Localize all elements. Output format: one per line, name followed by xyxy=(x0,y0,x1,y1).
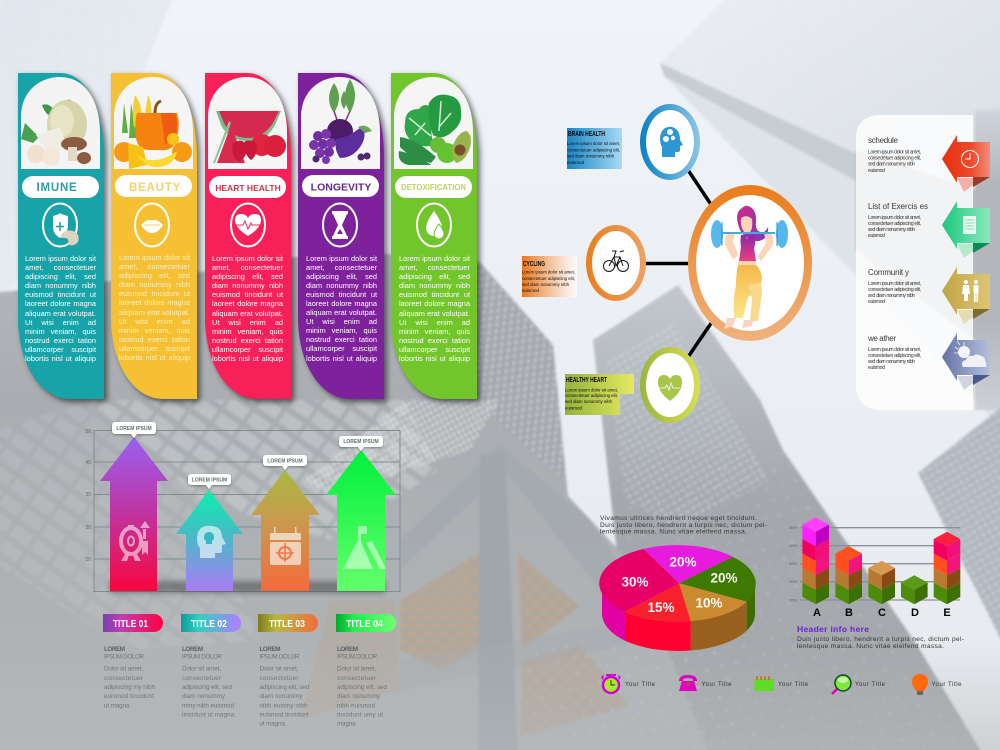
title pill 04: TITLE 04 xyxy=(346,619,383,630)
panel: heart health card: amet, consectetuer xyxy=(212,263,283,272)
item: weather: we ather xyxy=(867,334,896,343)
panel: detoxification card xyxy=(390,72,484,406)
panel: imune card: Lorem ipsum dolor sit xyxy=(25,254,96,263)
text: pie intro xyxy=(600,515,767,536)
column text 01: LOREM xyxy=(104,646,125,653)
panel: beauty card: aliquam erat volutpat. xyxy=(119,308,190,317)
arrow 2 xyxy=(176,490,243,591)
panel: longevity card: aliquam erat volutpat. xyxy=(306,308,377,317)
panel: longevity card: ullamcorper suscipit xyxy=(306,344,377,353)
panel: beauty card: euismod tincidunt ut xyxy=(119,289,190,298)
item: list of exercises: List of Exercis es xyxy=(868,202,928,211)
panel: heart health card: Lorem ipsum dolor sit xyxy=(212,254,283,263)
label: brain health: sed diam nonummy nibh xyxy=(567,154,614,160)
column text 01: consectetuer xyxy=(104,675,143,682)
column text 03: diam nonummy xyxy=(260,693,303,700)
column text 03: nibh euismy nibh xyxy=(260,702,308,710)
panel: imune card: ullamcorper suscipit xyxy=(25,345,96,354)
column text 04: IPSUM DOLOR xyxy=(337,654,377,660)
column text 04: diam nonummy xyxy=(337,693,381,700)
arrow icon: document xyxy=(942,201,990,258)
tooltip labels: LOREM IPSUM xyxy=(343,439,379,445)
item: schedule: consectetuer adipiscing elit, xyxy=(868,156,921,162)
chart: 3D pie: 20% xyxy=(669,554,697,570)
hub: healthy heart circle xyxy=(640,347,700,423)
item: weather xyxy=(867,334,921,371)
panel: detoxification card: euismod tincidunt ut xyxy=(399,290,470,299)
label: brain health xyxy=(567,128,622,169)
arrow 3 xyxy=(251,470,320,591)
legend: your title icons xyxy=(601,674,962,695)
chart: 3D stacked bars: D xyxy=(911,607,919,619)
column text 02: mmy nibh euismod xyxy=(182,702,234,710)
title pill 02 xyxy=(181,614,241,632)
chart: 3D stacked bars: A xyxy=(813,607,821,619)
text: header info: lentesque massa. Nunc vitae eleifend massa. xyxy=(797,643,944,650)
text: header info: Header info here xyxy=(797,624,869,634)
item: community: sed diam nonummy nibh xyxy=(868,293,915,299)
panel: heart health card: minim veniam, quis xyxy=(212,327,283,336)
chart: 3D pie xyxy=(599,545,756,651)
panel: beauty card: adipiscing elit, sed xyxy=(119,271,190,280)
panel: detoxification card: nostrud exerci tation xyxy=(399,336,470,345)
column text 03: euismod tincidunt xyxy=(260,712,309,718)
title pill 01: TITLE 01 xyxy=(113,619,148,630)
title pill 01 xyxy=(103,614,163,632)
label: cycling xyxy=(522,256,577,297)
panel: detoxification card: DETOXIFICATION xyxy=(401,183,466,192)
panel: beauty card: laoreet dolore magna xyxy=(119,298,190,307)
column text 03 xyxy=(260,646,310,728)
panel: longevity card: amet, consectetuer xyxy=(306,263,377,272)
item: list of exercises: sed diam nonummy nibh xyxy=(868,227,915,233)
panel: heart health card: lobortis nisl ut aliquip xyxy=(212,354,283,363)
column text 02: Dolor sit amet, xyxy=(182,666,221,672)
chart: 3D pie: 10% xyxy=(695,596,723,610)
panel: heart health card: HEART HEALTH xyxy=(215,183,281,193)
panel: detoxification card: laoreet dolore magna xyxy=(399,299,470,308)
column text 04 xyxy=(337,646,387,728)
chart: 3D stacked bars: 20% xyxy=(789,579,797,584)
icon: alarm clock xyxy=(601,674,621,693)
text: pie intro: Vivamus ultrices hendrerit neque eget tincidunt. xyxy=(600,515,757,522)
panel: detoxification card: lobortis nisl ut aliquip xyxy=(399,354,470,363)
column text 03: adipiscing elit, sed xyxy=(260,684,310,691)
panel: beauty card: amet, consectetuer xyxy=(119,262,190,271)
panel: detoxification card: Ut wisi enim ad xyxy=(399,318,470,327)
chart: arrow bars: 40 xyxy=(85,460,91,466)
panel: imune card: diam nonummy nibh xyxy=(25,281,96,290)
item: list of exercises: Lorem ipsum dolor sit amet, xyxy=(868,215,921,221)
legend: your title icons: Your Title xyxy=(932,682,962,688)
panel: beauty card: ullamcorper suscipit xyxy=(119,344,190,353)
icon: light bulb xyxy=(912,674,928,695)
panel: longevity card: Lorem ipsum dolor sit xyxy=(306,254,377,262)
label: cycling: consectetuer adipiscing elit, xyxy=(522,276,575,282)
item: weather: euismod xyxy=(868,365,885,371)
item: weather: Lorem ipsum dolor sit amet, xyxy=(868,347,921,353)
column text 02: IPSUM DOLOR xyxy=(182,654,222,660)
label: healthy heart: sed diam nonummy nibh xyxy=(565,399,612,405)
title pill 04 xyxy=(336,614,396,632)
chart: 3D stacked bars: B xyxy=(845,607,853,619)
chart: arrow bars: 30 xyxy=(85,492,91,498)
label: healthy heart: euismod xyxy=(565,406,582,412)
panel: imune card: minim veniam, quis xyxy=(25,327,96,336)
panel: beauty card: lobortis nisl ut aliquip xyxy=(119,353,190,362)
item: community: consectetuer adipiscing elit, xyxy=(868,287,921,293)
panel: detoxification card: minim veniam, quis xyxy=(399,327,470,336)
chart: arrow bars: 10 xyxy=(85,557,91,563)
arrow icon: sun and cloud xyxy=(942,333,990,390)
item: schedule: euismod xyxy=(868,168,885,174)
column text 02: consectetuer xyxy=(182,675,221,682)
item: schedule: Lorem ipsum dolor sit amet, xyxy=(868,150,921,156)
item: community: Communit y xyxy=(868,268,909,277)
panel: heart health card: Ut wisi enim ad xyxy=(212,318,283,327)
column text 02: adipiscing elit, sed xyxy=(182,684,232,691)
panel: longevity card xyxy=(296,72,391,406)
arrow 4 xyxy=(326,450,396,591)
label: cycling: CYCLING xyxy=(523,259,545,268)
column text 02: LOREM xyxy=(182,646,203,653)
panel: right side list xyxy=(856,115,990,410)
title pill 03 xyxy=(258,614,318,632)
panel: detoxification card: Lorem ipsum dolor sit xyxy=(399,254,470,263)
item: list of exercises xyxy=(868,202,928,239)
item: weather: sed diam nonummy nibh xyxy=(868,359,915,365)
panel: imune card: euismod tincidunt ut xyxy=(25,290,96,299)
panel: imune card: amet, consectetuer xyxy=(25,263,96,272)
legend: your title icons: Your Title xyxy=(778,682,809,688)
item: schedule: sed diam nonummy nibh xyxy=(868,162,915,168)
label: cycling: sed diam nonummy nibh xyxy=(522,282,569,288)
column text 01 xyxy=(104,646,155,710)
arrow 1 xyxy=(100,437,168,591)
column text 03: consectetuer xyxy=(260,675,298,682)
panel: longevity card: lobortis nisl ut aliquip xyxy=(306,354,377,363)
panel: beauty card: minim veniam, quis xyxy=(119,326,190,335)
panel: imune card: IMUNE xyxy=(36,182,78,194)
panel: heart health card: ullamcorper suscipit xyxy=(212,345,283,354)
column text 03: IPSUM DOLOR xyxy=(260,654,300,660)
panel: heart health card: aliquam erat volutpat. xyxy=(212,309,283,318)
column text 01: ut magna. xyxy=(104,702,131,710)
panel: detoxification card: diam nonummy nibh xyxy=(399,281,470,290)
panel: longevity card: LONGEVITY xyxy=(311,182,371,194)
panel: longevity card: minim veniam, quis xyxy=(306,326,377,335)
tooltip labels xyxy=(112,422,383,489)
arrow icon: people xyxy=(942,267,990,324)
chart: 3D stacked bars: 10% xyxy=(789,598,797,602)
icon: telephone xyxy=(679,675,697,691)
panel: beauty card xyxy=(110,72,204,406)
hub: central circle with weightlifter xyxy=(688,185,812,341)
panel: heart health card xyxy=(204,72,298,406)
panel: detoxification card: adipiscing elit, sed xyxy=(399,272,470,281)
panel: heart health card: laoreet dolore magna xyxy=(212,299,283,308)
chart: 3D stacked bars: 50% xyxy=(789,525,797,530)
panel: heart health card: diam nonummy nibh xyxy=(212,281,283,290)
item: community xyxy=(868,268,921,305)
title pill 03: TITLE 03 xyxy=(269,619,305,630)
icon: magnifier xyxy=(832,675,851,694)
panel: heart health card: nostrud exerci tation xyxy=(212,336,283,345)
column text 03: ut magna. xyxy=(260,720,287,728)
text: header info: Duis justo libero, hendrerit a turpis nec, dictum pel- xyxy=(797,636,964,643)
chart: 3D stacked bars: E xyxy=(943,607,951,619)
panel: beauty card: Lorem ipsum dolor sit xyxy=(119,253,190,262)
column text 01: adipiscing my nibh xyxy=(104,684,155,691)
chart: 3D stacked bars xyxy=(789,517,960,619)
tooltip labels: LOREM IPSUM xyxy=(267,458,303,464)
panel: detoxification card: amet, consectetuer xyxy=(399,263,470,272)
column text 04: LOREM xyxy=(337,646,358,653)
legend: your title icons: Your Title xyxy=(625,682,656,688)
icon: calendar xyxy=(754,676,774,691)
column text 02 xyxy=(182,646,236,718)
label: brain health: consectetuer adipiscing elit, xyxy=(567,148,620,154)
label: healthy heart: Lorem ipsum dolor sit amet, xyxy=(565,388,618,394)
chart: 3D pie: 20% xyxy=(710,570,738,586)
item: schedule: schedule xyxy=(868,136,899,145)
panel: beauty card: diam nonummy nibh xyxy=(119,280,190,289)
chart: 3D stacked bars: 30% xyxy=(789,561,797,566)
panel: longevity card: laoreet dolore magna xyxy=(306,299,377,308)
column text 04: consectetuer xyxy=(337,675,376,682)
label: brain health: euismod xyxy=(567,160,584,166)
panel: imune card xyxy=(16,72,111,406)
column text 04: magna. xyxy=(337,720,357,728)
column text 01: euismod tincidunt xyxy=(104,693,154,700)
panel: longevity card: nostrud exerci tation xyxy=(306,335,377,344)
panel: imune card: Ut wisi enim ad xyxy=(25,318,96,327)
panel: detoxification card: ullamcorper suscipit xyxy=(399,345,470,354)
label: healthy heart xyxy=(565,374,634,415)
column text 04: nibh euismod xyxy=(337,702,375,710)
column text 02: diam nonummy xyxy=(182,693,226,700)
tooltip labels: LOREM IPSUM xyxy=(192,478,227,484)
text: header info xyxy=(797,624,964,650)
column text 02: tincidunt ut magna. xyxy=(182,712,236,718)
label: brain health: BRAIN HEALTH xyxy=(568,129,605,138)
label: healthy heart: consectetuer adipiscing elit, xyxy=(565,393,618,399)
label: brain health: Lorem ipsum dolor sit amet, xyxy=(567,141,620,147)
chart: 3D pie: 30% xyxy=(621,574,649,590)
chart: arrow bars xyxy=(85,422,400,593)
chart: 3D pie: 15% xyxy=(647,600,675,615)
hub: brain health circle xyxy=(640,104,700,180)
column text 03: Dolor sit amet, xyxy=(260,666,299,672)
panel: imune card: adipiscing elit, sed xyxy=(25,272,96,281)
label: cycling: euismod xyxy=(522,288,539,294)
item: weather: consectetuer adipiscing elit, xyxy=(868,353,921,359)
column text 01: IPSUM DOLOR xyxy=(104,654,144,660)
item: list of exercises: consectetuer adipiscing elit, xyxy=(868,221,921,227)
panel: imune card: laoreet dolore magna xyxy=(25,299,96,308)
column text 03: LOREM xyxy=(260,646,280,653)
column text 04: tincidunt umy ut xyxy=(337,712,383,718)
legend: your title icons: Your Title xyxy=(855,682,886,688)
text: pie intro: Duis justo libero, hendrerit a turpis nec, dictum pel- xyxy=(600,522,767,529)
item: community: euismod xyxy=(868,299,885,305)
panel: longevity card: adipiscing elit, sed xyxy=(306,272,377,281)
label: cycling: Lorem ipsum dolor sit amet, xyxy=(522,270,575,276)
panel: beauty card: Ut wisi enim ad xyxy=(119,317,190,326)
title pill 02: TITLE 02 xyxy=(191,619,227,630)
panel: longevity card: diam nonummy nibh xyxy=(306,281,377,290)
legend: your title icons: Your Title xyxy=(702,682,732,688)
chart: arrow bars: 20 xyxy=(85,525,91,531)
panel: imune card: aliquam erat volutpat. xyxy=(25,309,96,318)
panel: imune card: nostrud exerci tation xyxy=(25,336,96,345)
text: pie intro: lentesque massa. Nunc vitae eleifend massa. xyxy=(600,528,747,536)
panel: heart health card: euismod tincidunt ut xyxy=(212,290,283,299)
chart: arrow bars: 50 xyxy=(85,429,91,435)
panel: longevity card: Ut wisi enim ad xyxy=(306,317,377,326)
panel: beauty card: BEAUTY xyxy=(129,182,181,194)
panel: imune card: lobortis nisl ut aliquip xyxy=(25,354,96,363)
hub: cycling circle xyxy=(586,225,646,301)
item: schedule xyxy=(868,136,921,174)
panel: longevity card: euismod tincidunt ut xyxy=(306,290,377,299)
column text 04: adipiscing elit, sed xyxy=(337,684,387,691)
chart: 3D stacked bars: 40% xyxy=(789,543,797,548)
item: list of exercises: euismod xyxy=(868,233,885,239)
panel: beauty card: nostrud exerci tation xyxy=(119,335,190,344)
panel: detoxification card: aliquam erat volutpat. xyxy=(399,309,470,318)
column text 04: Dolor sit amet, xyxy=(337,666,376,672)
panel: heart health card: adipiscing elit, sed xyxy=(212,272,283,281)
hub diagram: connectors xyxy=(641,167,716,360)
label: healthy heart: HEALTHY HEART xyxy=(566,375,607,384)
item: community: Lorem ipsum dolor sit amet, xyxy=(868,281,921,287)
arrow icon: clock xyxy=(942,135,990,192)
tooltip labels: LOREM IPSUM xyxy=(116,426,152,432)
column text 01: Dolor sit amet, xyxy=(104,666,143,672)
chart: 3D stacked bars: C xyxy=(878,607,886,619)
